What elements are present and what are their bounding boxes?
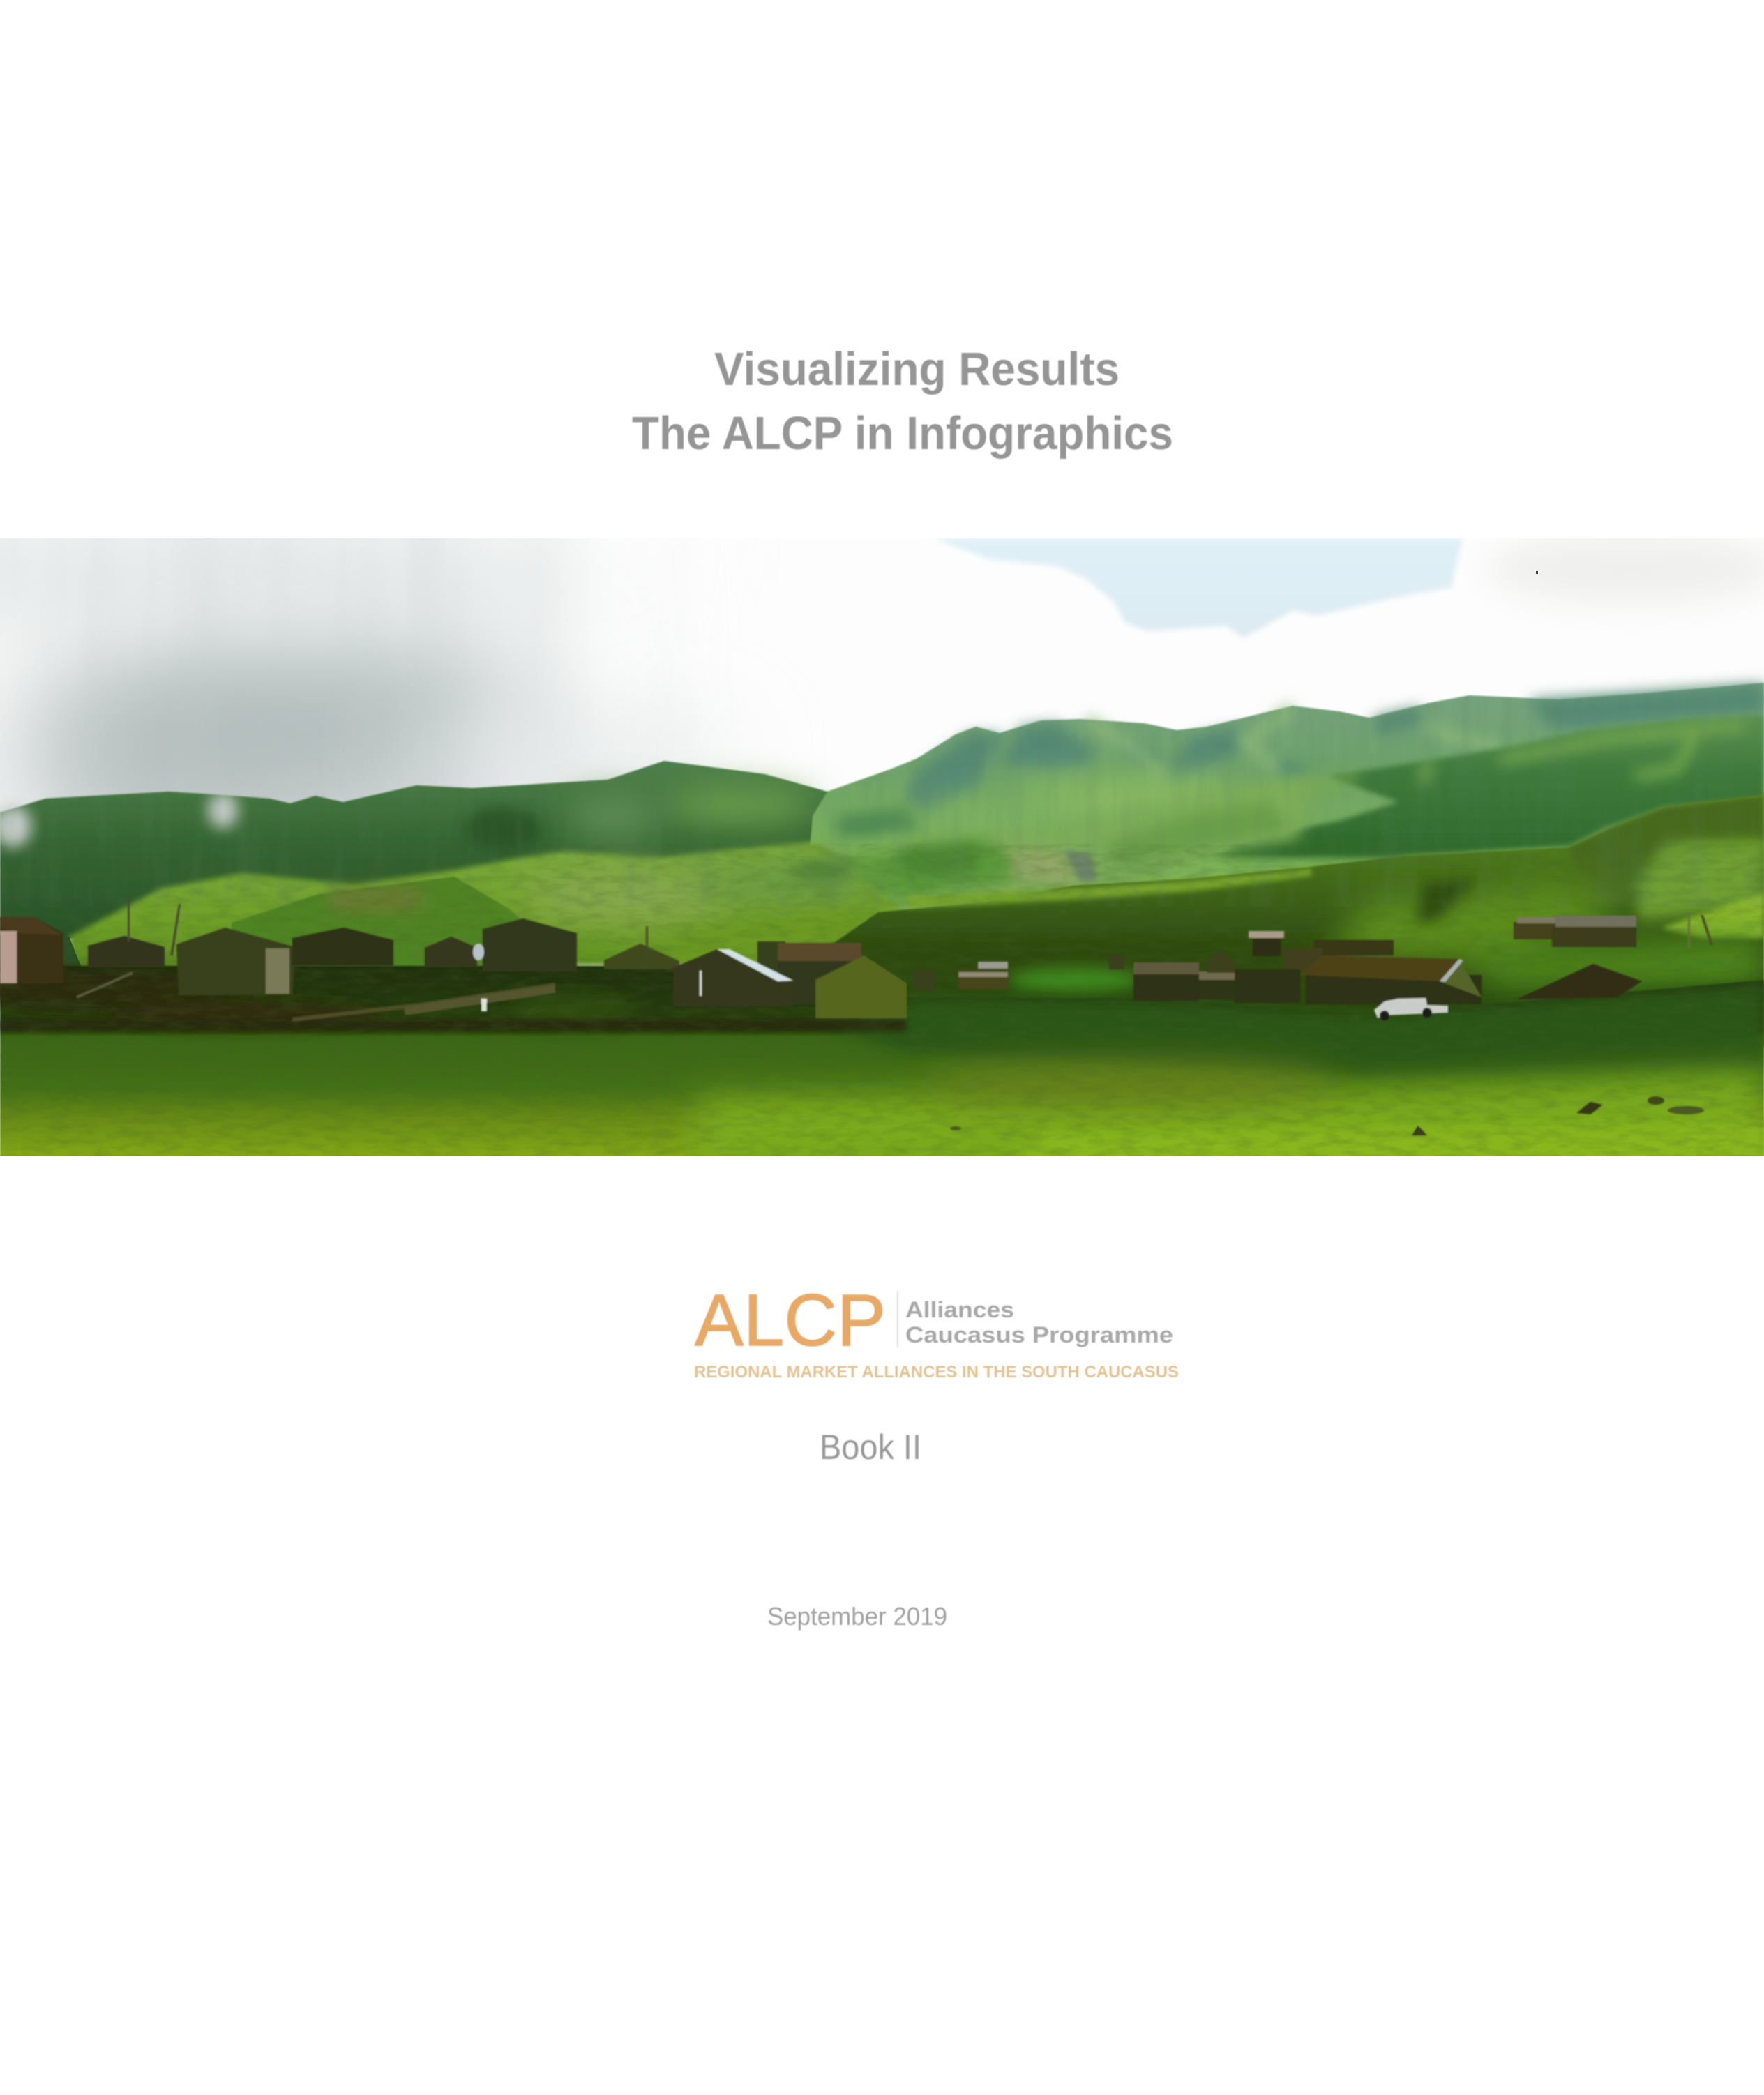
lit eroded slopes: [850, 776, 1309, 905]
photo grain texture: [0, 844, 1764, 1156]
dark escarpment and hill right: [816, 795, 1764, 1046]
logo: ALCP Alliances Caucasus Programme: [694, 1280, 1179, 1382]
logo wordmark ALCP: ALCP: [695, 1280, 886, 1361]
logo name: [905, 1297, 1173, 1347]
front hills left: [0, 842, 900, 973]
village houses left: [0, 900, 907, 1018]
foreground field: [0, 960, 1764, 1156]
fence: [77, 973, 555, 1020]
date: September 2019: [767, 1602, 947, 1631]
far mountains left: [0, 761, 907, 941]
logo name: Alliances: [905, 1297, 1014, 1322]
far mountains right: [802, 683, 1764, 935]
sky with clouds: [0, 538, 1764, 812]
book label: Book II: [820, 1428, 921, 1467]
title: [632, 343, 1173, 460]
logo name: Caucasus Programme: [905, 1322, 1173, 1347]
village houses right: [914, 914, 1713, 1135]
mid ridge right: [1215, 715, 1764, 856]
title: Visualizing Results: [714, 343, 1120, 395]
title: The ALCP in Infographics: [632, 407, 1173, 460]
mountain streak texture: [0, 683, 1764, 907]
photo: green mountain village landscape: [0, 523, 1764, 1200]
logo strapline: REGIONAL MARKET ALLIANCES IN THE SOUTH CAUCASUS: [694, 1363, 1179, 1382]
cover page: [0, 350, 1764, 1631]
